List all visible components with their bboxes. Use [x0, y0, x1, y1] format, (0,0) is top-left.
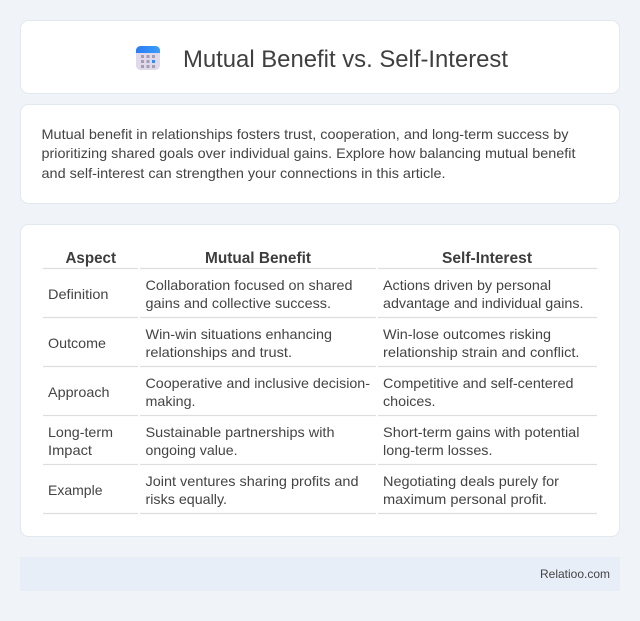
footer credit: Relatioo.com [540, 567, 610, 581]
row: Definition [48, 277, 584, 311]
panel: comparison table card [20, 224, 620, 536]
row: Outcome: Win-lose outcomes risking [383, 326, 551, 342]
row: Outcome: Outcome [48, 335, 106, 351]
row: Long-term Impact: Sustainable partnerships with [146, 424, 334, 440]
row: Example: Negotiating deals purely for [383, 473, 559, 489]
row: Approach [48, 375, 574, 409]
title: Mutual Benefit vs. Self-Interest [183, 46, 508, 73]
row: Example [48, 473, 559, 507]
row: Outcome: relationship strain and conflict. [383, 344, 580, 360]
table header [66, 250, 533, 267]
footer [20, 557, 620, 591]
panel: intro text card [20, 104, 620, 204]
intro paragraph: prioritizing shared goals over individual gains. Explore how balancing mutual benefit [42, 145, 576, 161]
row: Outcome: relationships and trust. [146, 344, 292, 360]
row: Definition: Actions driven by personal [383, 277, 551, 293]
table header: Aspect [66, 250, 117, 267]
panel: title card [20, 20, 620, 94]
table header: Mutual Benefit [205, 250, 312, 267]
row: Example: risks equally. [146, 491, 227, 507]
icon: calendar [136, 46, 160, 70]
row: Long-term Impact: Long-term [48, 424, 113, 440]
row: Outcome [48, 326, 580, 360]
row: Example: maximum personal profit. [383, 491, 547, 507]
table header: Self-Interest [442, 250, 533, 267]
row: Definition: Collaboration focused on shared [146, 277, 352, 293]
row: Long-term Impact [48, 424, 580, 458]
row: Long-term Impact: Impact [48, 442, 92, 458]
row: Approach: choices. [383, 393, 436, 409]
row: Definition: advantage and individual gains. [383, 295, 584, 311]
intro paragraph: and self-interest can strengthen your connections in this article. [42, 165, 446, 181]
row: Example: Example [48, 482, 103, 498]
row: Approach: Cooperative and inclusive decision- [146, 375, 370, 391]
row: Definition: gains and collective success. [146, 295, 331, 311]
row: Long-term Impact: Short-term gains with potential [383, 424, 580, 440]
row: Approach: making. [146, 393, 196, 409]
row: Approach: Competitive and self-centered [383, 375, 574, 391]
row: Long-term Impact: long-term losses. [383, 442, 492, 458]
row: Example: Joint ventures sharing profits and [146, 473, 358, 489]
row: Definition: Definition [48, 286, 108, 302]
row: Long-term Impact: ongoing value. [146, 442, 238, 458]
intro paragraph [42, 126, 576, 181]
intro paragraph: Mutual benefit in relationships fosters trust, cooperation, and long-term success by [42, 126, 568, 142]
row: Outcome: Win-win situations enhancing [146, 326, 332, 342]
row: Approach: Approach [48, 384, 110, 400]
